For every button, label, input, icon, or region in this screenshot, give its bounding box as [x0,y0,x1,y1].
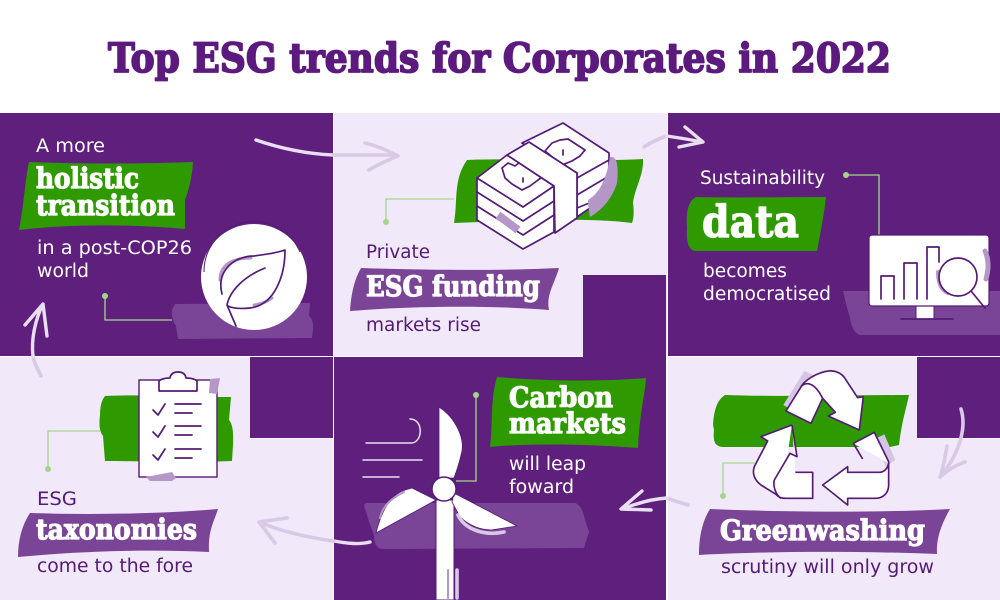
text: will leap foward [509,454,586,498]
paint blob [172,303,313,339]
green highlight [713,395,909,447]
text: becomes democratised: democratised [703,284,831,305]
green highlight [19,162,193,230]
connector [102,293,172,320]
panel: ESG taxonomies [0,357,333,600]
text: Sustainability: Sustainability [700,168,825,189]
paint blob [843,291,1000,335]
ribbon [18,509,218,557]
green highlight [454,159,643,223]
connector [456,392,479,481]
heading: holistic transition [36,162,175,222]
heading: holistic transition: holistic [36,162,139,195]
panel: greenwashing [668,357,1000,600]
heading: Carbon markets: Carbon [509,381,613,414]
text: becomes democratised: becomes [703,261,787,282]
green highlight [99,395,233,462]
title: Top ESG trends for Corporates in 2022 [108,35,891,82]
heading: Carbon markets: markets [509,407,626,440]
icon: banknotes stack [477,123,618,249]
panel: carbon markets [334,275,666,600]
arrow: panel 4 to 5 [621,491,688,510]
panel: holistic transition [0,113,333,356]
icon: wind turbine [376,407,517,600]
arrow: panel 1 to 2 [256,140,398,170]
text: ESG: ESG [37,489,77,510]
heading: Greenwashing: Greenwashing [720,514,925,547]
icon: monitor with chart [869,235,989,319]
text: come to the fore: come to the fore [37,556,193,577]
icon: clipboard checklist [139,372,220,481]
heading: holistic transition: transition [36,189,175,222]
text: becomes democratised [703,261,831,305]
ribbon [350,268,559,311]
heading: ESG funding: ESG funding [366,270,540,303]
panel: ESG funding [334,113,667,356]
ribbon [699,509,950,555]
paint blob [364,503,589,549]
connector [45,431,100,472]
text: markets rise: markets rise [366,315,481,336]
green highlight [490,377,646,448]
text: in a post-COP26 world [37,238,192,282]
connector [720,463,755,499]
text: in a post-COP26 world: in a post-COP26 [37,238,192,259]
panel: sustainability data [668,113,1000,356]
icon: leaf in circle [201,222,307,330]
arrow: panel 3 to 4 [940,409,965,477]
text: will leap foward: foward [509,477,574,498]
text: will leap foward: will leap [509,454,586,475]
arrow: panel 5 to 6 [259,518,370,544]
icon: wind lines [363,419,422,477]
text: in a post-COP26 world: world [37,261,89,282]
heading: taxonomies: taxonomies [36,513,197,546]
text: scrutiny will only grow: scrutiny will only grow [721,557,934,578]
connector [843,172,879,235]
connector [383,199,454,225]
text: A more: A more [36,136,105,157]
green highlight [687,197,826,251]
heading: Carbon markets [509,381,626,440]
icon: recycling arrows [753,371,895,505]
arrow: panel 2 to 3 [644,127,703,147]
text: Private: Private [366,242,430,263]
arrow: panel 6 to 1 [25,304,47,376]
heading: data: data [702,197,799,248]
